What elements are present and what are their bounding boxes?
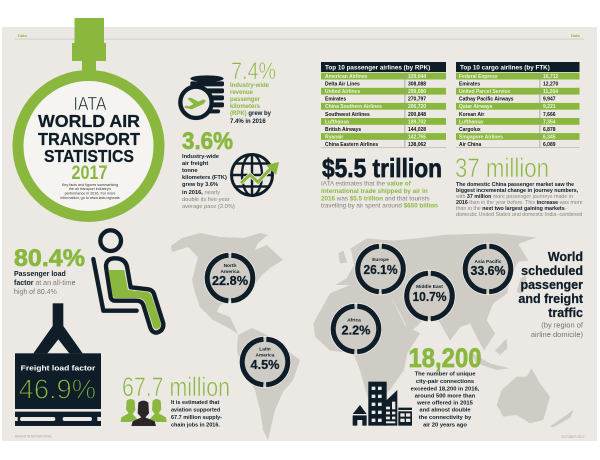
table: top 10 cargo airlines: United Parcel Service	[459, 89, 510, 95]
table: top 10 passenger airlines: China Eastern Airlines	[325, 142, 378, 148]
table: top 10 passenger airlines: 299,080	[408, 89, 426, 95]
table: top 10 passenger airlines: 270,797	[408, 97, 426, 103]
stat: 3.6% FTK: kilometers (FTK)	[182, 175, 227, 181]
header rule	[15, 39, 584, 40]
heading: World scheduled traffic: traffic	[548, 306, 583, 320]
stat: 3.6% FTK: 3.6%	[182, 128, 233, 155]
stat: 37 million	[455, 153, 583, 218]
stat: 7.4% RPK: passenger	[230, 97, 261, 103]
stat: $5.5 trillion: travelling by air spent around $650 billion	[321, 202, 438, 210]
ring: Latin America	[240, 336, 290, 388]
stat: 3.6% FTK: air freight	[182, 161, 208, 167]
table: top 10 passenger airlines: China Southern Airlines	[325, 104, 382, 110]
ring: North America: America	[221, 269, 240, 275]
heading: World scheduled traffic: scheduled	[521, 264, 583, 278]
section label right: Data	[571, 33, 580, 38]
table: top 10 passenger airlines: 189,702	[408, 119, 426, 125]
heading: World scheduled traffic: and freight	[518, 292, 584, 306]
ring: Africa	[330, 304, 382, 354]
stat: 7.4% RPK: Industry-wide	[230, 83, 270, 89]
table: top 10 passenger airlines: Ryanair	[325, 134, 343, 140]
table: top 10 cargo airlines: 12,270	[543, 82, 559, 88]
ring: Europe: Europe	[372, 257, 389, 263]
stat: 18,200 city-pair connections: around 500 more than	[415, 394, 476, 400]
ring: Asia Pacific: Asia Pacific	[475, 259, 502, 265]
stat: 18,200 city-pair connections: The number of unique	[415, 372, 476, 378]
ring: Africa: 2.2%	[342, 324, 370, 338]
stat: 3.6% FTK: average pace (2.0%)	[182, 204, 235, 210]
table: top 10 cargo airlines: Top 10 cargo airlines (by FTK)	[460, 64, 550, 72]
table: top 10 cargo airlines: Cargolux	[459, 127, 481, 133]
ring: Middle East	[404, 270, 455, 322]
table: top 10 passenger airlines: 308,088	[408, 82, 426, 88]
table: top 10 passenger airlines: 329,044	[408, 74, 426, 80]
stat: 18,200 city-pair connections: and almost double	[419, 408, 471, 414]
table: top 10 passenger airlines	[321, 62, 446, 148]
table: top 10 passenger airlines: 206,720	[408, 104, 426, 110]
stat: 37 million: 37 million	[455, 153, 549, 183]
stat: 18,200 city-pair connections: 18,200	[408, 343, 482, 373]
table: top 10 passenger airlines: Lufthansa	[325, 119, 349, 125]
stat: 80.4% passenger load factor: Passenger load	[14, 271, 66, 278]
icon: coins with plane	[180, 75, 224, 118]
freight load factor pallet	[15, 303, 101, 426]
title: World Air Transport Statistics: STATISTICS	[44, 146, 134, 166]
stat: 3.6% FTK: tonne	[182, 168, 197, 174]
table: top 10 cargo airlines: 11,264	[543, 89, 558, 95]
stat: 7.4% RPK: 7.4%	[231, 58, 276, 85]
table: top 10 passenger airlines: United Airlines	[325, 89, 360, 95]
table: top 10 passenger airlines: 142,765	[408, 134, 426, 140]
stat: 37 million: than in the next two largest gaining markets–	[456, 206, 568, 212]
ring: North America	[204, 252, 256, 304]
table: top 10 cargo airlines: Cathay Pacific Airways	[459, 97, 514, 103]
stat: $5.5 trillion: 2016 was $5.5 trillion and that tourists	[321, 196, 430, 202]
table: top 10 cargo airlines: 7,666	[543, 112, 556, 118]
map: North America	[171, 233, 283, 334]
stat: 67.7 million supply-chain jobs	[122, 372, 230, 428]
stat: 7.4% RPK	[230, 58, 276, 125]
ring: Europe: 26.1%	[364, 263, 398, 277]
table: top 10 passenger airlines: Top 10 passenger airlines (by RPK)	[325, 64, 430, 72]
table: top 10 cargo airlines: 6,878	[543, 127, 556, 133]
title: World Air Transport Statistics: WORLD AIR	[38, 111, 140, 131]
stat: 7.4% RPK: revenue	[230, 90, 254, 96]
stat: $5.5 trillion: IATA estimates that the value of	[321, 180, 412, 188]
table: top 10 passenger airlines: Emirates	[325, 97, 346, 103]
stat: 3.6% FTK: Industry-wide	[182, 154, 219, 160]
stat: 18,200 city-pair connections: city-pair connections	[416, 379, 474, 385]
stat: 37 million: The domestic China passenger market saw the	[456, 182, 574, 188]
stat: 18,200 city-pair connections	[408, 343, 482, 428]
stat: $5.5 trillion	[321, 153, 442, 210]
heading: World scheduled traffic: World	[548, 250, 583, 264]
stat: 18,200 city-pair connections: exceeded 18,200 in 2016,	[411, 386, 480, 392]
pallet value: 46.9%	[19, 374, 96, 405]
title: year: 2017	[72, 163, 108, 184]
table: top 10 cargo airlines: 6,345	[543, 134, 556, 140]
stat: 18,200 city-pair connections: were offered in 2015	[416, 400, 474, 406]
ring: Latin America: Latin	[259, 346, 271, 352]
section label left: Data	[18, 33, 27, 38]
stat: 18,200 city-pair connections: air 20 years ago	[423, 422, 467, 428]
ring: Africa: Africa	[347, 318, 361, 324]
ring: North America: 22.8%	[212, 274, 248, 288]
stat: 3.6% FTK: double its five-year	[182, 197, 230, 203]
heading: World scheduled traffic	[518, 250, 584, 339]
table: top 10 cargo airlines: Singapore Airlines	[459, 134, 503, 140]
table: top 10 cargo airlines: Air China	[459, 142, 481, 148]
icon: globe with growth arrow	[232, 154, 279, 196]
title: note	[60, 183, 120, 200]
stat: 67.7 million supply-chain jobs: chain jobs in 2016.	[171, 422, 220, 428]
stat: 80.4% passenger load factor	[14, 245, 85, 296]
stat: 3.6% FTK: in 2016, nearly	[182, 190, 220, 196]
ring: Europe	[355, 244, 406, 294]
table: top 10 cargo airlines: 9,947	[543, 97, 556, 103]
table: top 10 cargo airlines: 6,089	[543, 142, 556, 148]
heading: World scheduled traffic: airline domicile)	[531, 330, 583, 339]
ring: North America: North	[224, 263, 236, 269]
map: Eurasia, Africa and Australia	[313, 233, 573, 427]
stat: 37 million: biggest incremental change in journey numbers,	[456, 188, 579, 194]
stat: 3.6% FTK	[182, 128, 235, 210]
ring: Latin America: 4.5%	[250, 358, 280, 372]
stat: 80.4% passenger load factor: 80.4%	[14, 245, 85, 272]
stat: 67.7 million supply-chain jobs: 67.7 million	[122, 372, 230, 402]
table: top 10 cargo airlines: Qatar Airways	[459, 104, 493, 110]
footer left: BRAND INTERNATIONAL	[15, 434, 53, 438]
stat: 7.4% RPK: kilometers	[230, 104, 261, 110]
footer right: OCTOBER 2017	[561, 435, 585, 439]
table: top 10 cargo airlines: Korean Air	[459, 112, 484, 118]
table: top 10 cargo airlines: Lufthansa	[459, 119, 483, 125]
heading: World scheduled traffic: (by region of	[541, 320, 584, 330]
ring: Middle East: 10.7%	[412, 290, 446, 304]
stat: $5.5 trillion: $5.5 trillion	[322, 153, 442, 183]
title: note: performance in 2016. For more	[65, 192, 115, 196]
table: top 10 cargo airlines: 16,712	[543, 74, 559, 80]
stat: 80.4% passenger load factor: factor at an all-time	[14, 280, 76, 287]
stat: 7.4% RPK: (RPK) grew by	[230, 111, 272, 117]
stat: 7.4% RPK: 7.4% in 2016	[230, 119, 266, 125]
stat: 3.6% FTK: grew by 3.6%	[182, 182, 218, 188]
icon: three people	[121, 399, 167, 426]
icon: city buildings	[353, 382, 412, 426]
title: IATA: IATA	[74, 94, 106, 114]
table: top 10 passenger airlines: 200,848	[408, 112, 426, 118]
table: top 10 passenger airlines: Southwest Airlines	[325, 112, 370, 118]
stat: $5.5 trillion: international trade shipped by air in	[321, 188, 428, 195]
stat: 37 million: 2016 than in the year before. This increase was more	[456, 200, 583, 206]
ring: Asia Pacific	[462, 244, 514, 294]
icon: passenger seat	[93, 230, 163, 333]
table: top 10 cargo airlines: 9,221	[543, 104, 556, 110]
table: top 10 passenger airlines: British Airways	[325, 127, 361, 133]
table: top 10 passenger airlines: 138,062	[408, 142, 426, 148]
ring: Latin America: America	[256, 352, 275, 358]
title: note: the air transport industry's	[69, 187, 111, 191]
table: top 10 cargo airlines: 7,354	[543, 119, 556, 125]
title: World Air Transport Statistics: TRANSPORT	[38, 129, 140, 149]
table: top 10 passenger airlines: American Airlines	[325, 74, 368, 80]
stat: 18,200 city-pair connections: the connectivity by	[419, 415, 472, 421]
stat: 67.7 million supply-chain jobs: It is estimated that	[171, 400, 219, 406]
map: South America	[237, 328, 300, 440]
title: note: Key facts and figures summarising	[62, 183, 118, 187]
ring: Middle East: Middle East	[416, 284, 443, 290]
stat: 67.7 million supply-chain jobs: aviation supported	[171, 408, 220, 414]
title: note: information, go to www.iata.org/wats	[60, 196, 120, 200]
stat: 37 million: with 37 million more passenger journeys made in	[456, 194, 573, 200]
ring: Asia Pacific: 33.6%	[470, 264, 506, 278]
title: World Air Transport Statistics	[38, 111, 140, 166]
table: top 10 cargo airlines: Emirates	[459, 82, 480, 88]
heading: World scheduled traffic: passenger	[520, 278, 583, 292]
table: top 10 cargo airlines	[456, 62, 580, 148]
stat: 37 million: domestic United States and domestic India–combined	[456, 212, 582, 218]
pallet label: Freight load factor	[21, 363, 95, 372]
table: top 10 passenger airlines: Delta Air Lines	[325, 82, 360, 88]
stat: 80.4% passenger load factor: high of 80.4%	[14, 289, 57, 296]
table: top 10 passenger airlines: 144,028	[408, 127, 426, 133]
stat: 67.7 million supply-chain jobs: 67.7 million supply-	[171, 415, 222, 421]
title roundel	[18, 18, 159, 216]
table: top 10 cargo airlines: Federal Express	[459, 74, 498, 80]
